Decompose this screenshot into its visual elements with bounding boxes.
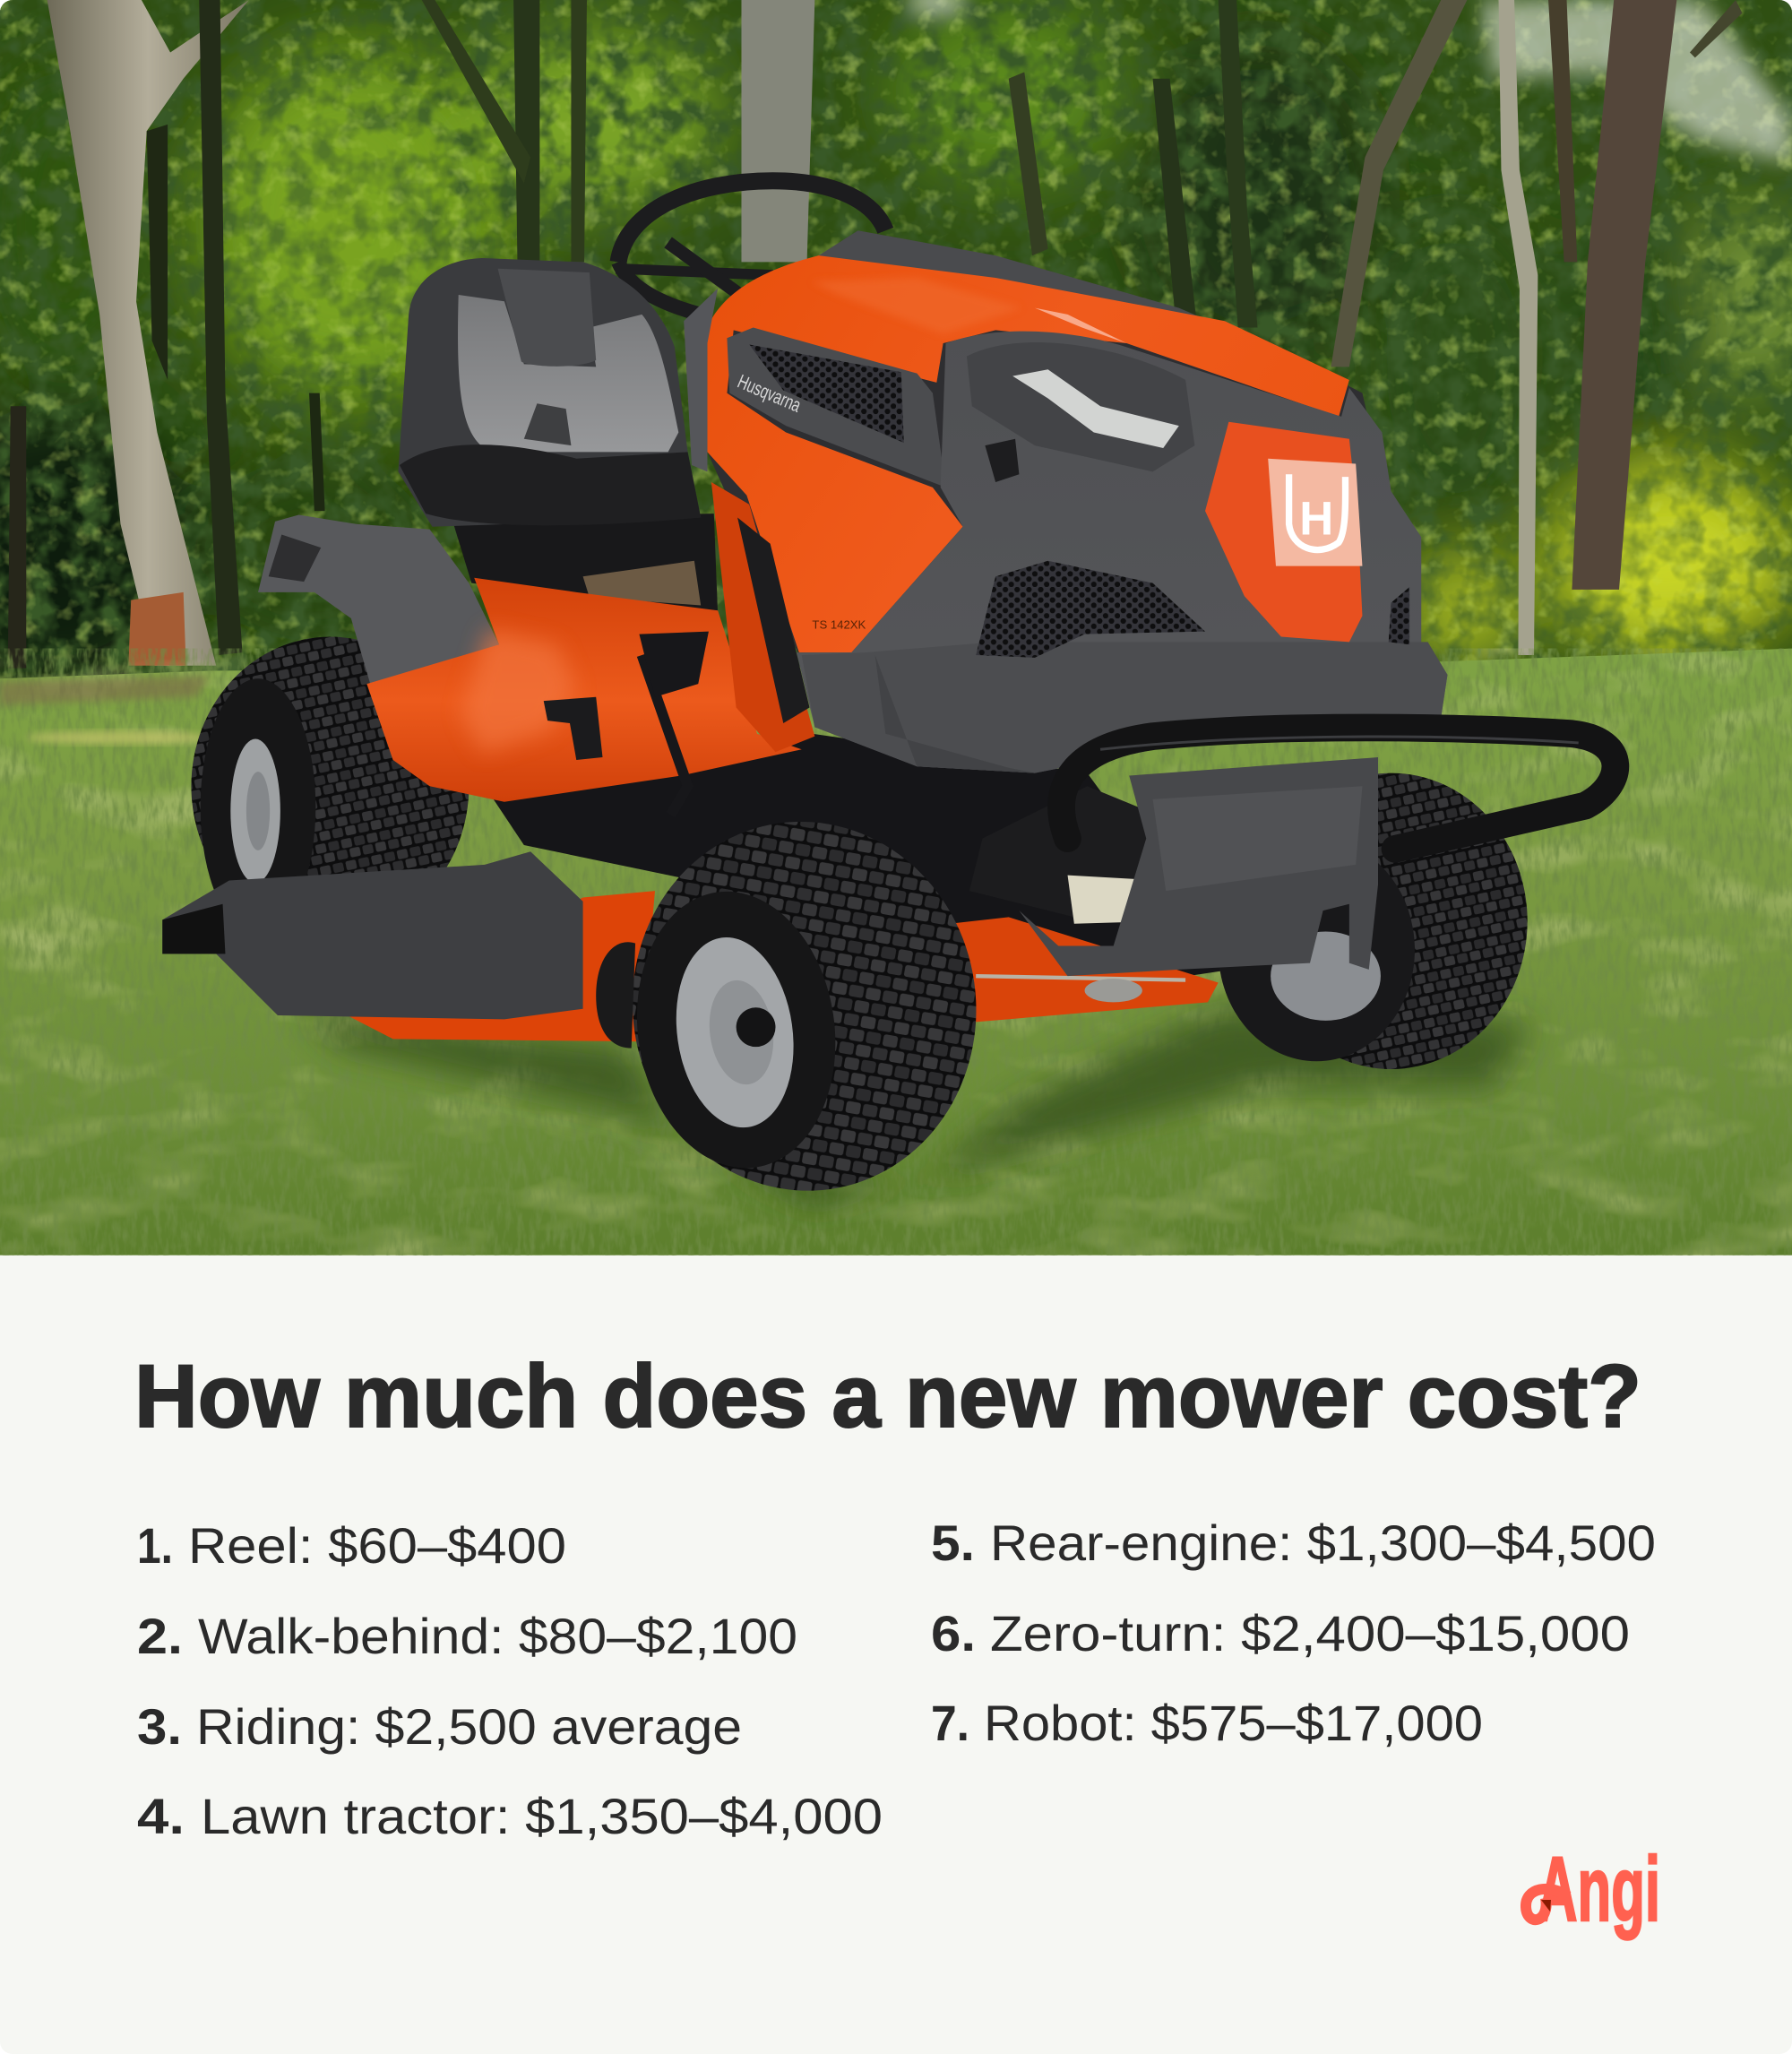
tree trunks [8, 0, 1742, 669]
item 4: Lawn tractor: $1,350–$4,000 [201, 1788, 883, 1844]
headlight [1012, 369, 1179, 448]
hood underlayer [707, 255, 1421, 655]
item 4: 4. [137, 1788, 185, 1844]
engine vent [985, 439, 1019, 482]
mower [162, 181, 1615, 1213]
item 3: Riding: $2,500 average [196, 1698, 742, 1755]
grey front shell [797, 332, 1447, 773]
seat [398, 258, 701, 527]
discharge chute [162, 851, 583, 1019]
lawn [0, 649, 1792, 1256]
side dark column [684, 289, 718, 471]
seat frame and engine gap [452, 514, 718, 616]
mower ground shadow [301, 1009, 1533, 1205]
foot pedal [544, 697, 603, 760]
front right vent [1389, 587, 1409, 644]
orange hood and side panel [707, 255, 1349, 652]
side grille [749, 345, 904, 443]
hood top vent [819, 230, 1225, 327]
bumper plate [1019, 757, 1378, 976]
Angi logo [1526, 1838, 1660, 1940]
item 7: 7. [931, 1695, 969, 1751]
model label: TS 142XK [812, 618, 866, 632]
logo badge [1268, 459, 1362, 566]
photo: orange riding mower on lawn [0, 0, 1792, 1256]
front left tire [608, 799, 1000, 1213]
engine underside [969, 786, 1310, 917]
lever [639, 632, 709, 815]
brand label: Husqvarna [734, 371, 804, 418]
item 2: Walk-behind: $80–$2,100 [198, 1608, 797, 1664]
steering wheel [616, 181, 885, 315]
bumper bar [1062, 728, 1615, 849]
item 5: 5. [931, 1515, 975, 1571]
sky [910, 0, 1792, 164]
rear left tire [191, 636, 470, 889]
orange rear body [366, 578, 802, 802]
undercarriage [493, 734, 1220, 975]
cost list: left column [137, 1517, 883, 1844]
item 2: 2. [137, 1608, 183, 1664]
mower deck orange [347, 891, 1219, 1041]
rear fender [258, 515, 499, 695]
item 6: 6. [931, 1605, 976, 1661]
title: How much does a new mower cost? [134, 1346, 1641, 1446]
side grille panel [727, 327, 946, 488]
front grille [976, 561, 1205, 658]
item 6: Zero-turn: $2,400–$15,000 [990, 1605, 1630, 1661]
item 7: Robot: $575–$17,000 [984, 1695, 1483, 1751]
front right tire [1219, 773, 1528, 1069]
cost list: right column [931, 1515, 1656, 1751]
sunlit foliage highlights [223, 79, 1775, 649]
item 1: Reel: $60–$400 [188, 1517, 566, 1574]
logo badge: H [1299, 492, 1333, 545]
item 1: 1. [137, 1517, 173, 1574]
Angi logo: Angi [1538, 1838, 1660, 1940]
small stump at tree base [128, 592, 186, 666]
item 5: Rear-engine: $1,300–$4,500 [990, 1515, 1656, 1571]
forest background [0, 0, 1792, 695]
orange nose panel [1205, 422, 1362, 642]
item 3: 3. [137, 1698, 182, 1755]
